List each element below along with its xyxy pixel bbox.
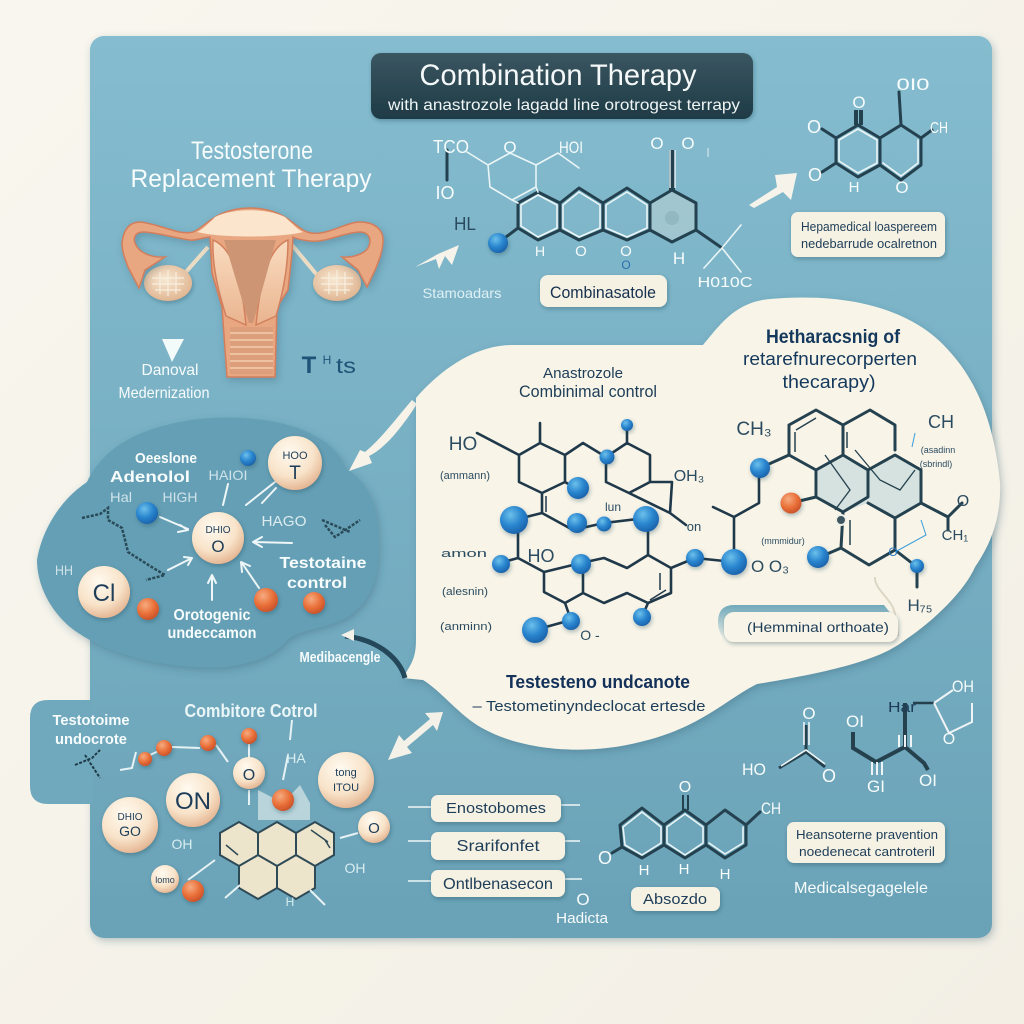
- label: hadicta: [556, 890, 609, 927]
- bottom left molecule cluster: OH: [344, 860, 366, 876]
- pill: bottom right note: noedenecat cantroteril: [799, 844, 935, 859]
- pill: top right note: [791, 212, 945, 257]
- pill: second: [408, 832, 580, 860]
- bottom left molecule cluster: tong: [335, 767, 357, 779]
- bubble heading right: [743, 327, 917, 392]
- top centre molecule: O: [650, 134, 664, 153]
- bottom centre molecule: H: [679, 861, 689, 878]
- molecule: anastrozole: HO: [449, 434, 477, 455]
- label: symbols: T: [302, 352, 317, 379]
- label: symbols: [302, 352, 356, 379]
- bottom left molecule cluster: HA: [286, 750, 306, 766]
- top centre molecule: O: [575, 243, 587, 260]
- molecule: testosterone undecanoate: CH₁: [942, 527, 968, 544]
- cream bubble panel: [403, 298, 1000, 750]
- molecule: anastrozole: (ammann): [440, 470, 490, 482]
- arrow: to top molecule: [415, 245, 459, 269]
- double arrow: [388, 712, 443, 760]
- left blob panel: [37, 418, 378, 667]
- top centre molecule: O: [503, 138, 517, 157]
- bottom left molecule cluster: H: [286, 895, 294, 909]
- heading: testosterone replacement therapy: Testosterone: [191, 137, 313, 165]
- left blob contents: DHIO: [206, 525, 231, 536]
- molecule: testosterone undecanoate: O: [888, 545, 898, 559]
- top centre molecule: HL: [454, 214, 476, 234]
- molecule: testosterone undecanoate: O: [957, 493, 969, 510]
- bottom left molecule cluster: O: [368, 820, 380, 837]
- molecule: testosterone undecanoate: (sbrindl): [920, 459, 952, 469]
- top right molecule: O: [852, 93, 866, 112]
- left blob contents: HOO: [282, 450, 308, 462]
- icon: reproductive anatomy: [122, 208, 383, 377]
- bottom right branched molecule: GI: [867, 777, 885, 796]
- pill: third: Ontlbenasecon: [443, 876, 553, 893]
- molecule: anastrozole: amon: [441, 548, 487, 560]
- left blob contents: Cl: [93, 580, 115, 607]
- notch outline: [875, 577, 898, 636]
- molecule: testosterone undecanoate: CH₃: [736, 419, 772, 440]
- pill: combination: [540, 275, 667, 307]
- tab label: [52, 712, 130, 778]
- bottom left molecule cluster: O: [243, 767, 255, 784]
- bottom right branched molecule: OI: [919, 771, 937, 790]
- left blob contents: [55, 436, 367, 642]
- pill: second: Srarifonfet: [456, 838, 540, 855]
- molecule: anastrozole: (alesnin): [442, 586, 488, 598]
- bottom left molecule cluster: ITOU: [333, 782, 359, 794]
- blob labels: Adenolol: [110, 469, 190, 486]
- molecule: testosterone undecanoate: (asadinn: [921, 445, 955, 455]
- pill: first: [408, 795, 580, 822]
- main panel: [90, 36, 992, 938]
- bubble heading left: [519, 365, 657, 401]
- title banner: Combination Therapy: [420, 59, 696, 92]
- tab label: undocrote: [55, 731, 127, 748]
- pill: third: [408, 870, 582, 897]
- title banner: [371, 53, 753, 119]
- bottom right small molecule: [742, 704, 836, 786]
- curved arrow: bubble to blob label: [345, 636, 405, 678]
- top centre molecule: I: [706, 145, 710, 160]
- label: medical: Medicalsegagelele: [794, 880, 928, 897]
- bottom right branched molecule: Har: [888, 699, 916, 716]
- blob labels: HH: [55, 562, 73, 578]
- bottom centre molecule: O: [598, 848, 612, 868]
- caption: testosterone undecanoate: [472, 672, 706, 715]
- blob labels: Orotogenic: [174, 607, 251, 624]
- molecule: testosterone undecanoate: H₇₅: [908, 596, 932, 615]
- top right molecule: [807, 75, 948, 197]
- heading: testosterone replacement therapy: [130, 137, 372, 193]
- label: gonadal modernization: Danoval: [142, 362, 198, 379]
- molecule: anastrozole: OH₃: [674, 468, 704, 485]
- bottom left molecule cluster: OH: [172, 836, 192, 852]
- molecule: anastrozole: HO: [528, 546, 554, 566]
- pill: bottom right note: [787, 822, 945, 863]
- bottom right branched molecule: [846, 677, 974, 796]
- hex cluster: [220, 785, 334, 899]
- top centre molecule: O: [620, 243, 632, 260]
- bottom right branched molecule: O: [943, 731, 955, 748]
- pill: top right note: Hepamedical loaspereem: [801, 219, 937, 234]
- top centre molecule: IO: [435, 183, 455, 203]
- bottom right branched molecule: OI: [846, 712, 864, 731]
- molecule: anastrozole: O -: [580, 627, 600, 643]
- bottom left molecule cluster: lomo: [155, 875, 175, 885]
- top centre molecule: H: [673, 249, 685, 268]
- top right molecule: 0I0: [896, 75, 930, 94]
- label: symbols: ts: [336, 355, 356, 378]
- pill: hemminal orthodrate: (Hemminal orthoate): [747, 619, 889, 635]
- top right molecule: H: [849, 179, 859, 196]
- pill: absozdo: Absozdo: [643, 891, 707, 908]
- atom balls: [268, 436, 322, 490]
- tab label: Testotoime: [52, 712, 130, 729]
- top right molecule: O: [895, 178, 909, 197]
- pill: absozdo: [631, 887, 720, 911]
- blob labels: Hal: [110, 489, 132, 505]
- bubble heading right: thecarapy): [782, 372, 876, 392]
- label: gonadal modernization: [118, 339, 210, 402]
- blob labels: HIGH: [162, 489, 198, 505]
- top centre molecule: [433, 134, 753, 291]
- bottom left molecule cluster: DHIO: [118, 812, 143, 823]
- bottom right small molecule: O: [822, 766, 836, 786]
- label: medicine: Medibacengle: [300, 649, 380, 666]
- blob labels: Oeeslone: [135, 450, 197, 467]
- label: stamoadars: Stamoadars: [422, 285, 502, 301]
- blob labels: undeccamon: [168, 625, 256, 642]
- list pills: [408, 795, 582, 897]
- caption: testosterone undecanoate: Testesteno undcanote: [506, 672, 690, 692]
- pill: bottom right note: Heansoterne pravention: [796, 827, 938, 842]
- blob labels: HAGO: [262, 513, 306, 530]
- label: hadicta: O: [576, 890, 590, 909]
- heading: testosterone replacement therapy: Replacement Therapy: [130, 165, 372, 193]
- squiggle strands: [82, 508, 360, 580]
- bubble heading left: Anastrozole: [543, 365, 623, 382]
- bottom left molecule cluster: GO: [119, 823, 141, 839]
- arrowhead: curved: [341, 629, 354, 641]
- top centre molecule: TCO: [433, 137, 469, 157]
- blob labels: Testotaine: [280, 555, 367, 572]
- bubble heading right: Hetharacsnig of: [766, 327, 901, 348]
- molecule: anastrozole: [440, 419, 805, 643]
- bottom left molecule cluster: ON: [175, 788, 211, 815]
- left blob contents: T: [289, 463, 301, 484]
- molecule: anastrozole: (anminn): [440, 621, 492, 633]
- bottom centre molecule: CH: [761, 799, 781, 818]
- blob labels: control: [287, 575, 347, 592]
- molecule: anastrozole: (mmmidur): [761, 536, 805, 546]
- bottom centre molecule: H: [639, 862, 649, 879]
- caption: testosterone undecanoate: – Testometinyndeclocat ertesde: [472, 698, 706, 715]
- bottom centre molecule: H: [720, 866, 730, 883]
- top centre molecule: H: [535, 243, 545, 259]
- arrow: to right molecule: [749, 173, 797, 208]
- bubble heading left: Combinimal control: [519, 382, 657, 401]
- top right molecule: O: [807, 117, 821, 137]
- molecule: testosterone undecanoate: [736, 410, 969, 615]
- blob labels: [55, 450, 367, 642]
- bottom right small molecule: HO: [742, 760, 766, 779]
- molecule: testosterone undecanoate: CH: [928, 412, 954, 432]
- heading: combination control: Combitore Cotrol: [184, 701, 318, 721]
- top centre molecule: HOI: [559, 138, 583, 157]
- title banner: with anastrozole lagadd line orotrogest terrapy: [387, 97, 740, 114]
- bottom left tab panel: [30, 700, 93, 804]
- molecule: anastrozole: on: [687, 519, 701, 534]
- arrows: [160, 482, 292, 600]
- top right molecule: O: [808, 165, 822, 185]
- bottom centre molecule: O: [679, 779, 691, 796]
- arrow: bubble to blob: [349, 400, 417, 471]
- top centre molecule: O: [681, 134, 695, 153]
- label: symbols: H: [323, 353, 331, 367]
- pill: top right note: nedebarrude ocalretnon: [801, 236, 937, 251]
- bubble heading right: retarefnurecorperten: [743, 349, 917, 369]
- blob labels: HAIOI: [208, 467, 248, 483]
- top right molecule: CH: [930, 120, 948, 137]
- molecule: anastrozole: lun: [605, 500, 621, 514]
- top centre molecule: O: [621, 258, 631, 272]
- bottom left molecule cluster: [102, 720, 390, 909]
- pill: first: Enostobomes: [446, 800, 546, 817]
- label: hadicta: Hadicta: [556, 910, 609, 927]
- bottom right branched molecule: OH: [952, 677, 974, 696]
- bottom right small molecule: O: [802, 704, 816, 723]
- top centre molecule: H010C: [698, 274, 753, 291]
- molecule: anastrozole: O O₃: [751, 557, 789, 576]
- pill: hemminal orthodrate: [718, 605, 898, 642]
- left blob contents: O: [211, 537, 225, 556]
- pill: combination: Combinasatole: [550, 283, 656, 302]
- label: gonadal modernization: Medernization: [118, 385, 210, 402]
- bottom centre molecule: [598, 779, 781, 883]
